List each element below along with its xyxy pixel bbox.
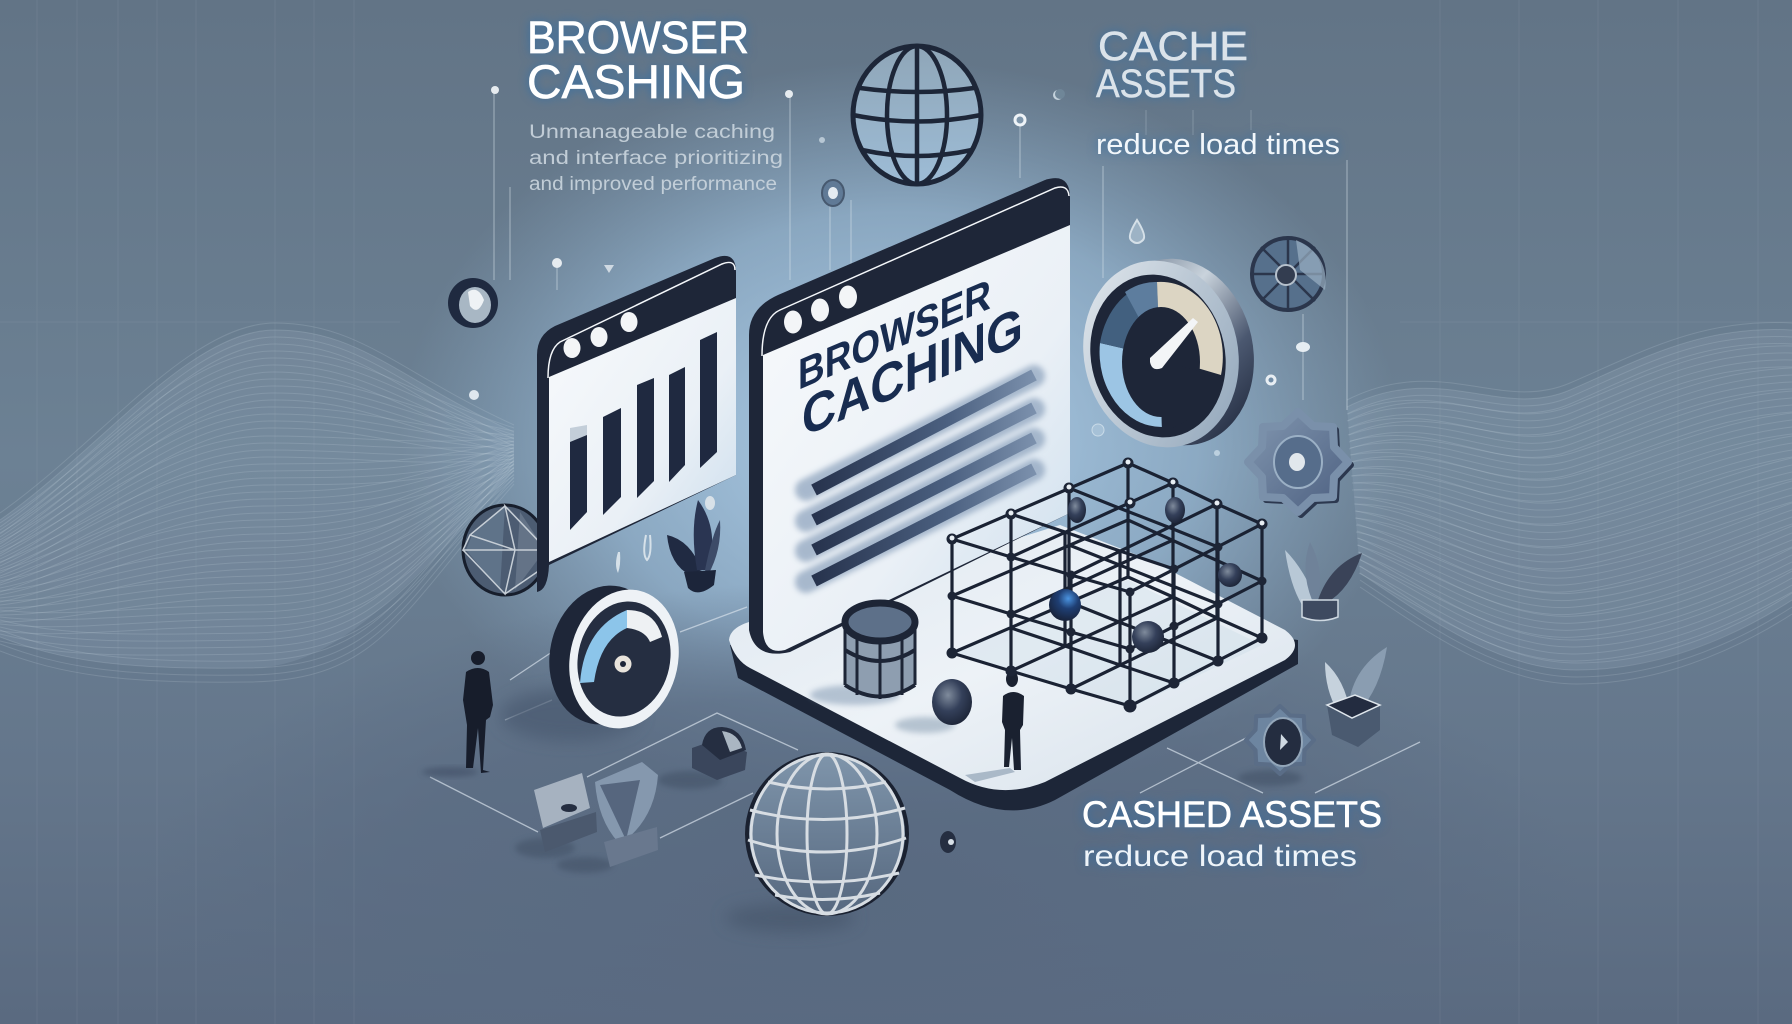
- window heading: browser caching: BROWSER: [798, 269, 991, 400]
- title: browser caching: CASHING: [527, 55, 745, 108]
- window heading: browser caching: CACHING: [802, 294, 1023, 448]
- grid nodes: [946, 458, 1268, 712]
- window text lines: [806, 375, 1034, 582]
- icon: wire globe (bottom): [725, 754, 907, 932]
- icon: knob box: [658, 727, 747, 789]
- icon: storage drum: [810, 603, 915, 705]
- icon: dark plant: [667, 496, 720, 592]
- window dots: [564, 312, 638, 358]
- grid reflection: [952, 580, 1262, 708]
- title: browser caching: [527, 12, 749, 108]
- icon: wireframe globe (top): [853, 46, 981, 184]
- floor lines: [430, 607, 1420, 838]
- window body: [549, 298, 736, 562]
- connector lines and pins: [469, 86, 1347, 573]
- platform shadow edge: [730, 600, 1298, 810]
- heading: cashed assets: CASHED ASSETS: [1082, 794, 1382, 835]
- icon: spoked gear wheel: [1250, 236, 1326, 312]
- main window dots: [784, 286, 857, 334]
- window highlight line: [548, 262, 735, 378]
- icon: plant right lower: [1325, 647, 1387, 747]
- title: browser caching: BROWSER: [527, 12, 749, 63]
- wave mesh: right: [1347, 323, 1792, 684]
- description text: Unmanageable caching: [529, 122, 775, 143]
- description text: and interface prioritizing: [529, 148, 783, 169]
- grid spheres: [1049, 497, 1242, 653]
- icon: shield block: [557, 762, 658, 873]
- person on platform: [965, 671, 1024, 782]
- icon: dark ball on platform: [895, 679, 972, 733]
- platform surface: [729, 525, 1295, 790]
- description text: and improved performance: [529, 174, 777, 195]
- grid verticals: [952, 463, 1262, 706]
- grid node highlights: [950, 460, 1264, 540]
- caption: reduce load times (bottom): reduce load times: [1083, 840, 1357, 873]
- icon: small floor dot: [940, 831, 956, 853]
- grid level: middle: [952, 520, 1262, 649]
- grid level: top: [952, 463, 1262, 592]
- person left: [422, 651, 493, 777]
- icon: orb button: [448, 278, 498, 328]
- icon: small gauge dial: [500, 575, 691, 741]
- grid level: bottom: [952, 577, 1262, 706]
- panel: small browser window with bar chart: [537, 256, 736, 592]
- main window highlight line: [762, 187, 1069, 356]
- icon: large gear: [1248, 412, 1351, 515]
- panel: main browser window: [749, 178, 1070, 654]
- heading: cache assets: CACHE: [1098, 23, 1248, 69]
- bar chart: [570, 332, 717, 530]
- caption: reduce load times (top): reduce load times: [1096, 129, 1340, 161]
- wave mesh: left: [0, 323, 514, 682]
- platform: [729, 525, 1298, 810]
- main window body: [763, 225, 1070, 651]
- icon: plant right upper: [1285, 542, 1362, 620]
- icon: small cog: [1238, 706, 1314, 786]
- icon: document box: [515, 773, 597, 858]
- heading: cache assets: ASSETS: [1096, 62, 1236, 106]
- 3D cache grid: [946, 458, 1268, 712]
- description text: [529, 122, 783, 195]
- heading: cache assets: [1096, 23, 1248, 106]
- icon: faceted sphere: [463, 505, 547, 595]
- icon: speed gauge: [1066, 244, 1271, 462]
